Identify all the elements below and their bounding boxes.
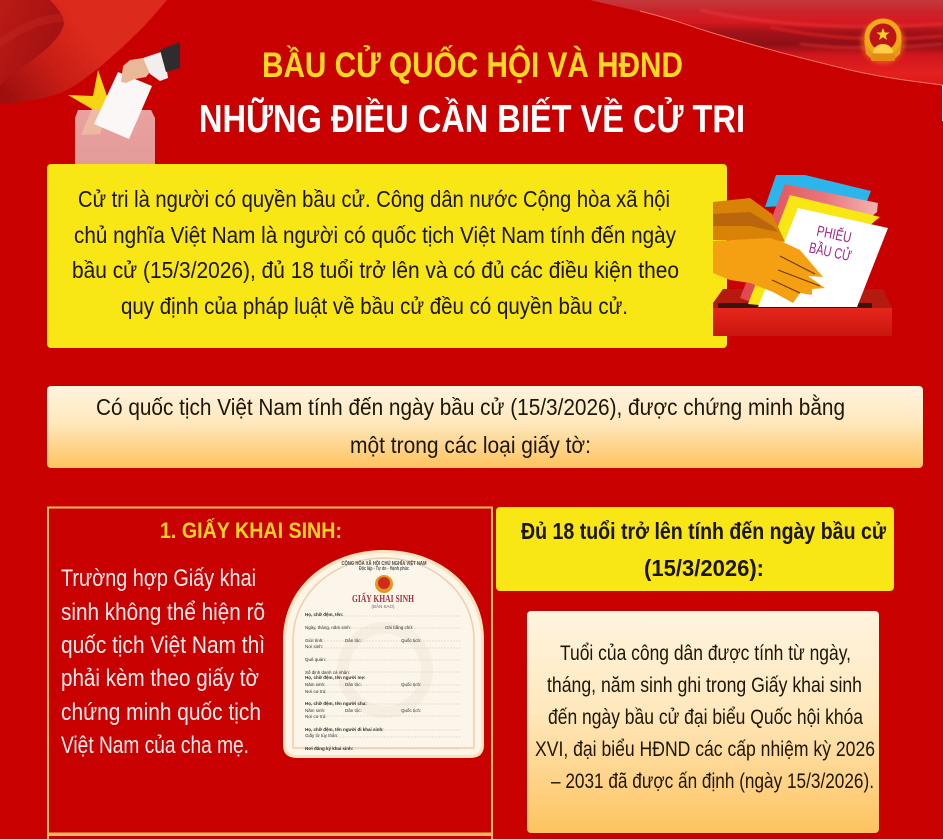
icon: national emblem bbox=[861, 18, 905, 64]
star bbox=[68, 70, 132, 135]
illustration: birth certificate document: Độc lập - Tự do - Hạnh phúc bbox=[359, 566, 409, 572]
illustration: birth certificate document: Nơi cư trú: bbox=[305, 714, 326, 719]
illustration: birth certificate document: Quốc tịch: bbox=[401, 638, 421, 643]
ribbon: top left flag bbox=[0, 0, 167, 104]
sleeve bbox=[160, 42, 180, 72]
illustration: birth certificate document: Dân tộc: bbox=[345, 638, 362, 643]
panel: next section edge bbox=[48, 835, 492, 839]
illustration: birth certificate document: Nơi đăng ký khai sinh: bbox=[305, 746, 354, 751]
illustration: birth certificate document: Quốc tịch: bbox=[401, 708, 421, 713]
icon: hand casting ballot bbox=[713, 175, 892, 336]
illustration: birth certificate document: Dân tộc: bbox=[345, 708, 362, 713]
panel: age calculation bbox=[527, 611, 879, 833]
text block: age calculation: đến ngày bầu cử đại biểu Quốc hội khóa bbox=[548, 706, 863, 729]
hand bbox=[121, 58, 150, 83]
illustration: birth certificate document: Nơi cư trú: bbox=[305, 689, 326, 694]
text block: definition: Cử tri là người có quyền bầu cử. Công dân nước Cộng hòa xã hội bbox=[78, 186, 670, 212]
ballot box bbox=[75, 110, 155, 164]
title: BẦU CỬ QUỐC HỘI VÀ HĐND bbox=[262, 45, 683, 85]
illustration: birth certificate document: Giới tính: bbox=[305, 638, 323, 643]
illustration: birth certificate document: Ghi bằng chữ: bbox=[385, 624, 414, 630]
illustration: birth certificate document bbox=[283, 550, 484, 758]
text block: definition: bầu cử (15/3/2026), đủ 18 tuổi trở lên và có đủ các điều kiện theo bbox=[72, 257, 679, 283]
text block: birth certificate note: phải kèm theo giấy tờ bbox=[61, 665, 259, 692]
heading: birth certificate: 1. GIẤY KHAI SINH: bbox=[160, 518, 342, 543]
panel: age heading bbox=[496, 507, 894, 591]
illustration: birth certificate document: Quê quán: bbox=[305, 657, 326, 662]
icon: hand dropping ballot into box bbox=[68, 42, 180, 164]
text block: birth certificate note: sinh không thể hiện rõ bbox=[61, 599, 265, 626]
illustration: birth certificate document: Giấy tờ tùy thân: bbox=[305, 733, 338, 738]
panel: birth certificate bbox=[48, 508, 492, 834]
panel: age heading: (15/3/2026): bbox=[644, 555, 764, 581]
title: NHỮNG ĐIỀU CẦN BIẾT VỀ CỬ TRI bbox=[199, 97, 745, 141]
illustration: birth certificate document: Ngày, tháng, năm sinh: bbox=[305, 625, 351, 630]
illustration: birth certificate document: (BẢN SAO) bbox=[371, 603, 395, 609]
text block: birth certificate note: chứng minh quốc tịch bbox=[61, 699, 261, 726]
text block: age calculation: Tuổi của công dân được tính từ ngày, bbox=[560, 642, 851, 665]
text block: definition: chủ nghĩa Việt Nam là người có quốc tịch Việt Nam tính đến ngày bbox=[74, 222, 676, 248]
text block: birth certificate note: quốc tịch Việt Nam thì bbox=[61, 632, 265, 659]
text block: age calculation: XVI, đại biểu HĐND các cấp nhiệm kỳ 2026 bbox=[535, 738, 875, 761]
illustration: birth certificate document: Họ, chữ đệm, tên: bbox=[305, 612, 344, 617]
panel: nationality banner bbox=[47, 386, 923, 468]
illustration: birth certificate document: Họ, chữ đệm, tên người cha: bbox=[305, 701, 367, 706]
illustration: birth certificate document: GIẤY KHAI SINH bbox=[352, 592, 414, 605]
illustration: birth certificate document: Quốc tịch: bbox=[401, 682, 421, 687]
title bbox=[199, 45, 745, 141]
text block: definition bbox=[72, 186, 679, 319]
panel: age heading: Đủ 18 tuổi trở lên tính đến ngày bầu cử bbox=[521, 518, 886, 544]
illustration: birth certificate document: Họ, chữ đệm, tên người đi khai sinh: bbox=[305, 727, 384, 732]
ribbon: top right drape bbox=[590, 0, 943, 121]
illustration: birth certificate document: Số định danh cá nhân: bbox=[305, 670, 350, 675]
illustration: birth certificate document: Năm sinh: bbox=[305, 682, 325, 687]
panel: nationality banner: Có quốc tịch Việt Nam tính đến ngày bầu cử (15/3/2026), được chứng minh bằng bbox=[96, 394, 845, 420]
ballot paper bbox=[94, 72, 152, 139]
illustration: birth certificate document: CỘNG HÒA XÃ HỘI CHỦ NGHĨA VIỆT NAM bbox=[342, 559, 427, 567]
text block: age calculation bbox=[535, 642, 875, 793]
illustration: birth certificate document: Dân tộc: bbox=[345, 682, 362, 687]
text block: birth certificate note: Việt Nam của cha mẹ. bbox=[61, 732, 249, 759]
text block: definition: quy định của pháp luật về bầu cử đều có quyền bầu cử. bbox=[121, 293, 628, 319]
illustration: birth certificate document: Năm sinh: bbox=[305, 708, 325, 713]
illustration: birth certificate document: Nơi sinh: bbox=[305, 644, 323, 649]
icon: hand casting ballot: PHIẾU bbox=[815, 223, 853, 247]
illustration: birth certificate document: Họ, chữ đệm, tên người mẹ: bbox=[305, 675, 366, 680]
panel: voter definition bbox=[47, 164, 892, 348]
panel: nationality banner: một trong các loại giấy tờ: bbox=[350, 432, 591, 458]
cuff bbox=[143, 51, 168, 81]
text block: birth certificate note bbox=[61, 565, 265, 759]
text block: age calculation: – 2031 đã được ấn định (ngày 15/3/2026). bbox=[551, 770, 874, 793]
text block: birth certificate note: Trường hợp Giấy khai bbox=[61, 565, 256, 592]
icon: hand casting ballot: BẦU CỬ bbox=[807, 239, 853, 265]
text block: age calculation: tháng, năm sinh ghi trong Giấy khai sinh bbox=[547, 674, 862, 697]
